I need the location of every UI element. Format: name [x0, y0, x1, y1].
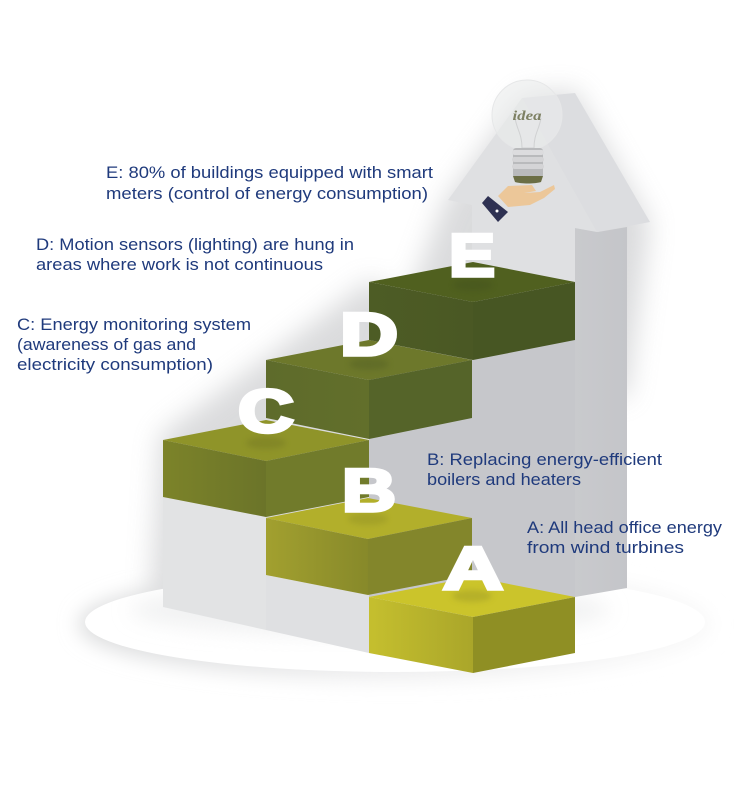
white stack under C	[163, 497, 266, 630]
label A	[527, 519, 723, 557]
step A block	[369, 577, 575, 673]
idea text: idea	[512, 109, 542, 124]
letter B: B	[342, 457, 396, 524]
label C: electricity consumption)	[17, 356, 213, 374]
label E: E: 80% of buildings equipped with smart	[106, 164, 433, 182]
label D	[36, 236, 354, 274]
label B: B: Replacing energy-efficient	[427, 451, 662, 469]
ellipse platform	[85, 589, 678, 672]
label A: A: All head office energy	[527, 519, 723, 537]
bulb screw base	[512, 148, 544, 184]
letter C: C	[238, 378, 294, 445]
wall under E and D	[369, 340, 575, 597]
label D: D: Motion sensors (lighting) are hung in	[36, 236, 354, 254]
hand	[498, 185, 555, 207]
bulb glass	[515, 118, 541, 148]
arrow right roof face	[522, 93, 650, 232]
label B: boilers and heaters	[427, 471, 581, 489]
bulb halo	[492, 80, 562, 150]
arrow front face	[448, 98, 597, 345]
icon: light bulb on hand	[482, 80, 562, 222]
label E	[106, 164, 433, 203]
label B	[427, 451, 662, 489]
letter E: E	[449, 222, 495, 289]
white stack under B	[266, 575, 369, 653]
arrow stem side face	[575, 227, 627, 597]
label D: areas where work is not continuous	[36, 256, 323, 274]
letter A: A	[443, 535, 503, 602]
label C	[17, 316, 251, 374]
label E: meters (control of energy consumption)	[106, 185, 428, 203]
step C block	[163, 420, 369, 517]
letter D: D	[340, 301, 398, 368]
sleeve	[482, 196, 508, 222]
step E block	[369, 262, 575, 360]
label A: from wind turbines	[527, 539, 684, 557]
label C: C: Energy monitoring system	[17, 316, 251, 334]
label C: (awareness of gas and	[17, 336, 196, 354]
upward arrow	[369, 93, 650, 597]
step B block	[266, 498, 472, 595]
background glow	[79, 90, 711, 679]
step D block	[266, 340, 472, 439]
